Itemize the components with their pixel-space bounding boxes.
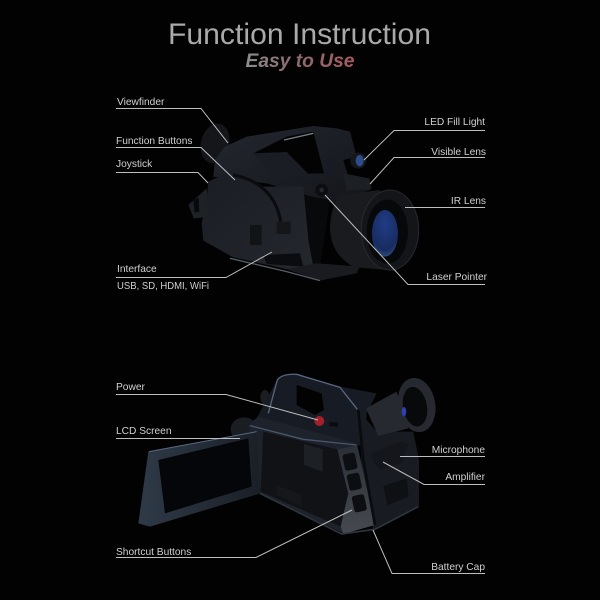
back panel recess [261, 432, 348, 527]
callout: Viewfinder: Viewfinder [117, 97, 165, 108]
callout: Shortcut Buttons: Shortcut Buttons [116, 547, 191, 558]
callout: Power: Power [116, 382, 145, 393]
IR lens ring [361, 190, 419, 270]
callout: Viewfinder [116, 97, 228, 143]
callout: Battery Cap: Battery Cap [431, 562, 485, 573]
camera: rear view [138, 374, 440, 534]
callout: IR Lens: IR Lens [451, 196, 486, 207]
callout: Shortcut Buttons [116, 510, 352, 558]
lens barrel [330, 190, 397, 271]
camera body [202, 170, 313, 271]
shortcut buttons [342, 452, 367, 513]
lower edge highlight [230, 258, 320, 281]
callout: LED Fill Light: LED Fill Light [424, 117, 485, 128]
callout: Amplifier: Amplifier [445, 472, 486, 483]
handle window [253, 132, 324, 174]
callout: Joystick [116, 159, 208, 183]
body side [358, 410, 419, 530]
callout: Function Buttons: Function Buttons [116, 136, 192, 147]
microphone and amplifier pad [372, 442, 408, 469]
viewfinder eyepiece [196, 120, 234, 166]
body back [248, 417, 357, 533]
side port [383, 478, 409, 505]
callout: Interface [116, 252, 272, 292]
callout: Power [116, 382, 318, 420]
lower edge [260, 493, 418, 534]
callout: LED Fill Light [364, 117, 485, 160]
callout: Interface: USB, SD, HDMI, WiFi [117, 281, 209, 292]
eyepiece ring [394, 375, 440, 435]
buttons panel [337, 445, 375, 534]
front lens hint [231, 417, 257, 441]
LED fill light [350, 153, 366, 169]
callout: Microphone: Microphone [432, 445, 485, 456]
handle [257, 374, 377, 447]
laser pointer [315, 184, 328, 196]
handle [213, 126, 370, 203]
callout: Battery Cap [373, 530, 485, 574]
vents [304, 444, 323, 472]
callout: LCD Screen: LCD Screen [116, 426, 172, 437]
IR lens glass [372, 210, 398, 257]
subtitle: Easy to Use [246, 51, 355, 72]
interface panel [263, 253, 303, 267]
callout: Function Buttons [116, 136, 235, 180]
title: Function Instruction [168, 18, 431, 51]
callout: Interface: Interface [117, 264, 157, 275]
callout: Visible Lens: Visible Lens [431, 147, 486, 158]
camera: front view [188, 120, 419, 281]
callout: Amplifier [383, 462, 486, 484]
handle window [297, 385, 324, 415]
callout: IR Lens [405, 196, 486, 208]
grip ridge [233, 175, 281, 222]
eyepiece barrel [366, 392, 408, 436]
callout: LCD Screen [116, 426, 240, 438]
callout: Laser Pointer: Laser Pointer [426, 272, 488, 283]
callout: Laser Pointer [325, 195, 488, 284]
hand strap [188, 188, 209, 219]
power button [314, 416, 324, 426]
callout: Visible Lens [370, 147, 486, 184]
lower mount [287, 263, 360, 281]
lens barrel shadow gap [303, 195, 330, 267]
visible lens housing [343, 173, 372, 191]
LCD screen frame [138, 432, 261, 527]
LCD screen [158, 438, 252, 513]
callout: Microphone [400, 445, 485, 456]
callout: Joystick: Joystick [116, 159, 153, 170]
side edge [358, 410, 375, 525]
